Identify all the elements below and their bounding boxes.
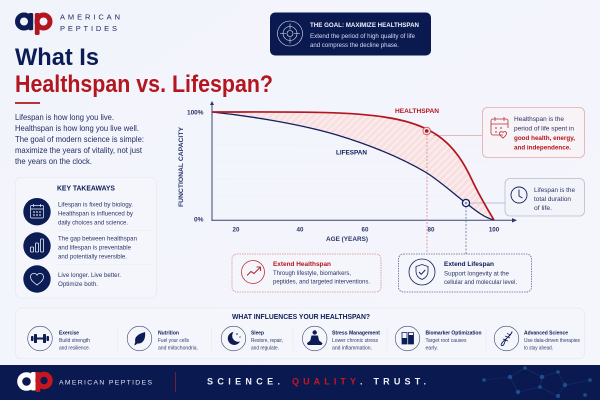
takeaway: live longer: Live longer. Live better. (58, 272, 121, 279)
callout: lifespan definition (505, 178, 584, 216)
axis labels: 80 (428, 226, 435, 234)
tagline (207, 376, 426, 386)
icon: calendar heart (491, 117, 508, 138)
takeaway: live longer: Optimize both. (58, 281, 98, 288)
item: biomarker optimization: early. (426, 345, 438, 351)
curve: healthspan (212, 112, 494, 220)
panel: extend lifespan: Support longevity at the (444, 270, 509, 278)
item: sleep: Sleep (251, 330, 264, 336)
item: advanced science (494, 326, 580, 351)
intro paragraph: the years on the clock. (15, 157, 92, 166)
axis labels: 100% (187, 110, 204, 116)
axis labels: 100 (489, 226, 500, 234)
callout: lifespan definition: Lifespan is the (534, 187, 575, 194)
shaded healthspan gap (212, 112, 494, 220)
item: stress management (302, 326, 380, 351)
tagline: QUALITY (292, 376, 356, 386)
title: What Is (15, 44, 99, 71)
item: stress management: and inflammation. (332, 345, 372, 351)
callout: the goal: THE GOAL: MAXIMIZE HEALTHSPAN (310, 22, 419, 29)
item: stress management: Lower chronic stress (332, 338, 378, 344)
panel: key takeaways (16, 178, 156, 298)
takeaway: lifespan fixed (23, 198, 134, 226)
logo: American Peptides: AMERICAN (60, 12, 120, 22)
chart: functional capacity by age: LIFESPAN (336, 150, 368, 156)
axis labels: AGE (YEARS) (326, 236, 368, 243)
item: advanced science: Advanced Science (524, 330, 568, 336)
dashed drop lines (426, 131, 428, 254)
axis labels: FUNCTIONAL CAPACITY (178, 126, 185, 207)
panel: extend healthspan: Extend Healthspan (273, 261, 331, 268)
panel: extend healthspan: peptides, and targeted interventions. (273, 278, 370, 286)
intro paragraph: Lifespan is how long you live. (15, 113, 114, 122)
item: biomarker optimization (395, 326, 482, 351)
takeaway: preventable gap: and lifespan is preventable (58, 244, 131, 252)
marker: healthspan end (423, 127, 431, 135)
panel: extend lifespan: Extend Lifespan (444, 261, 494, 268)
chart: functional capacity by age (178, 101, 517, 254)
item: sleep (221, 326, 283, 351)
item: sleep: and regulate. (251, 345, 279, 351)
marker: lifespan end (462, 199, 470, 207)
item: exercise: and resilience. (59, 345, 90, 351)
callout: lifespan definition: of life. (534, 205, 552, 212)
icon: target (278, 21, 302, 46)
icon: shield (409, 259, 435, 285)
title (15, 44, 273, 98)
item: nutrition (127, 326, 198, 351)
takeaway: lifespan fixed: Healthspan is influenced by (58, 210, 134, 217)
intro paragraph: The goal of modern science is simple: (15, 135, 144, 144)
footer band (0, 365, 600, 400)
molecule network decoration (482, 366, 592, 398)
item: advanced science: to stay ahead. (524, 345, 553, 351)
callout: healthspan definition: good health, energy, (514, 135, 575, 142)
callout: the goal (270, 12, 431, 56)
heading: key takeaways: KEY TAKEAWAYS (57, 186, 115, 192)
takeaway: lifespan fixed: daily choices and science. (58, 219, 128, 226)
heading: influences: WHAT INFLUENCES YOUR HEALTHSPAN? (232, 314, 370, 321)
curve: lifespan (212, 112, 494, 220)
panel: extend lifespan (398, 254, 532, 292)
item: stress management: Stress Management (332, 330, 380, 336)
callout: the goal: Extend the period of high quality of life (310, 33, 416, 40)
item: exercise (28, 326, 90, 351)
takeaway: live longer (23, 265, 121, 293)
logo: American Peptides: PEPTIDES (60, 24, 117, 33)
callout: healthspan definition: Healthspan is the (514, 116, 564, 123)
icon: trend up (242, 260, 264, 284)
intro paragraph: Healthspan is how long you live well. (15, 124, 139, 133)
tagline: . TRUST. (360, 376, 426, 386)
takeaway: preventable gap: The gap between healthspan (58, 236, 137, 242)
axes (210, 101, 517, 222)
logo: American Peptides (18, 12, 120, 35)
callout: lifespan definition: total duration (534, 196, 571, 203)
item: nutrition: Fuel your cells (158, 338, 189, 344)
callout: healthspan definition (482, 108, 584, 158)
panel: extend healthspan (232, 254, 381, 292)
takeaway: preventable gap: and potentially reversible. (58, 254, 127, 260)
icon: clock (511, 187, 527, 203)
axis labels (178, 110, 500, 243)
axis labels: 60 (362, 226, 369, 234)
title: Healthspan vs. Lifespan? (15, 71, 273, 98)
tagline: SCIENCE. (207, 376, 280, 386)
intro paragraph: maximize the years of vitality, not just (15, 146, 143, 155)
callout: healthspan definition: period of life spent in (514, 126, 574, 132)
axis labels: 40 (297, 226, 304, 234)
intro paragraph (15, 113, 144, 166)
takeaway: lifespan fixed: Lifespan is fixed by biology. (58, 201, 133, 208)
callout: healthspan definition: and independence. (514, 144, 571, 152)
axis labels: 20 (233, 226, 240, 234)
item: biomarker optimization: Biomarker Optimization (426, 330, 482, 336)
curve labels: HEALTHSPAN (395, 108, 440, 115)
panel: extend lifespan: cellular and molecular level. (444, 279, 517, 286)
footer brand name: AMERICAN PEPTIDES (59, 380, 152, 386)
item: sleep: Restore, repair, (251, 338, 283, 344)
footer logo (20, 372, 50, 392)
panel: what influences your healthspan (16, 308, 584, 358)
item: exercise: Build strength (59, 338, 90, 344)
item: biomarker optimization: Target root causes (426, 338, 467, 344)
callout: the goal: and compress the decline phase. (310, 42, 399, 49)
item: exercise: Exercise (59, 330, 79, 336)
item: advanced science: Use data-driven therapies (524, 338, 580, 344)
takeaway: preventable gap (23, 232, 137, 260)
panel: extend healthspan: Through lifestyle, biomarkers, (273, 270, 351, 277)
item: nutrition: and mitochondria. (158, 345, 198, 351)
item: nutrition: Nutrition (158, 330, 180, 336)
title accent rule (15, 102, 40, 104)
axis labels: 0% (194, 216, 204, 224)
